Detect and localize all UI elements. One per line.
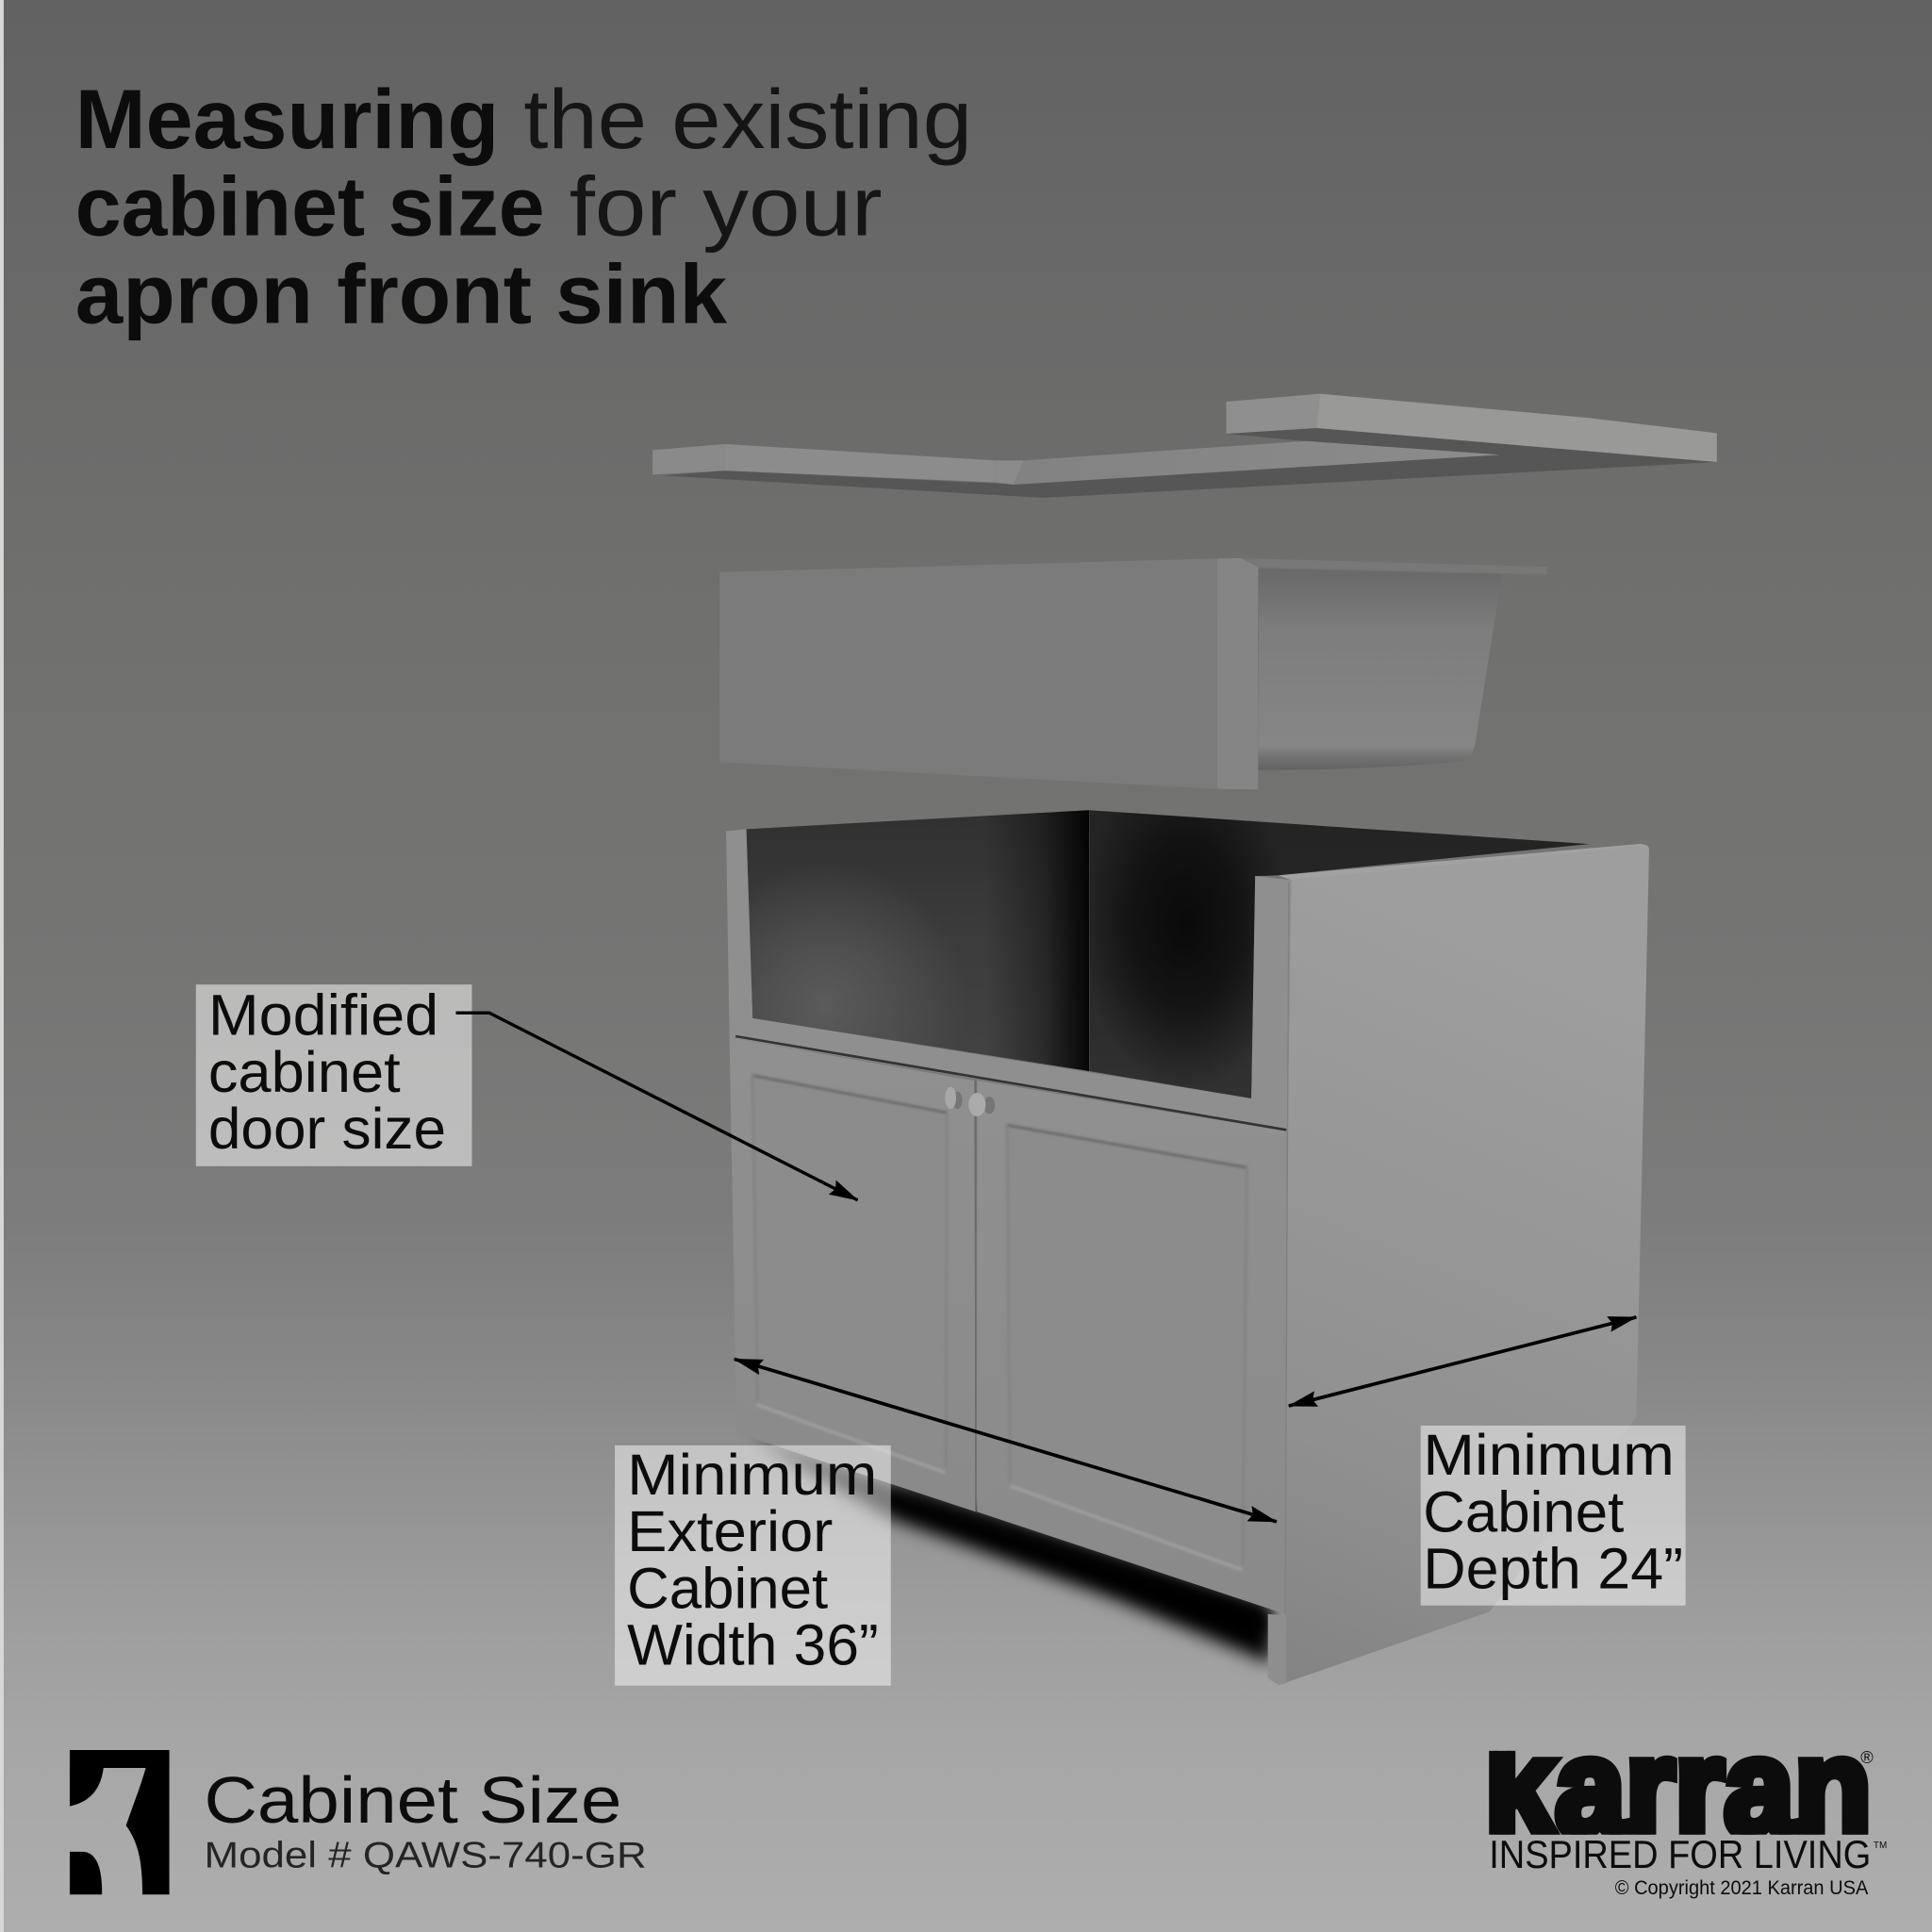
side panel: [1279, 845, 1649, 1685]
label: modified cabinet door size: cabinet: [208, 1040, 401, 1105]
countertop: [652, 394, 1717, 498]
tagline: INSPIRED FOR LIVING: [1489, 1832, 1871, 1876]
label: modified cabinet door size: [196, 983, 471, 1166]
interior right wall: [1089, 810, 1590, 1098]
registered mark: ®: [1860, 1747, 1874, 1767]
sink apron face: [719, 558, 1217, 789]
sink: [719, 558, 1547, 789]
sink bowl: [1258, 569, 1502, 770]
sink apron return: [1217, 558, 1258, 789]
door bottom bevels: [756, 1405, 1242, 1570]
label: minimum cabinet depth: Cabinet: [1423, 1479, 1624, 1544]
title: [75, 73, 972, 340]
arrow: door size: [456, 1013, 858, 1200]
panel recess shadows: [752, 1076, 1247, 1167]
door knobs: [945, 1087, 995, 1116]
interior left wall: [747, 810, 1090, 1071]
sink rim: [1217, 558, 1547, 574]
gap between doors: [975, 1081, 977, 1511]
left door inner panel: [752, 1076, 947, 1467]
side panel top edge: [1279, 844, 1645, 880]
title: for your: [570, 160, 883, 254]
icon: K monogram: [70, 1750, 170, 1894]
arrow: cabinet width: [735, 1359, 1277, 1522]
copyright: © Copyright 2021 Karran USA: [1615, 1875, 1869, 1899]
label: minimum cabinet depth: Depth 24”: [1423, 1536, 1683, 1601]
label: modified cabinet door size: Modified: [208, 983, 438, 1049]
trademark: TM: [1874, 1841, 1887, 1851]
right door: [977, 1081, 1287, 1614]
label: modified cabinet door size: door size: [208, 1097, 446, 1162]
cabinet: [684, 758, 1649, 1685]
title: the existing: [523, 73, 972, 166]
countertop underside shadow: [663, 427, 1716, 498]
title: apron front sink: [75, 247, 728, 340]
label: minimum cabinet depth: Minimum: [1423, 1423, 1675, 1488]
countertop right end: [1226, 394, 1320, 434]
floor shadow under cabinet: [751, 1437, 1272, 1663]
right door inner panel: [1007, 1125, 1247, 1565]
footer heading: Cabinet Size: [205, 1763, 622, 1837]
label: minimum cabinet depth: [1421, 1423, 1686, 1606]
brand wordmark: karran: [1485, 1711, 1872, 1865]
countertop left end: [652, 444, 724, 474]
front frame: [726, 829, 1291, 1131]
title: Measuring: [75, 73, 499, 166]
model number: Model # QAWS-740-GR: [205, 1836, 647, 1876]
title: cabinet size: [75, 160, 545, 254]
countertop middle top: [1014, 441, 1500, 485]
left page edge: [0, 0, 4, 1932]
brand logo: [1489, 1750, 1886, 1899]
label: minimum exterior cabinet width: Exterior: [627, 1499, 833, 1564]
left door: [730, 1037, 976, 1511]
label: minimum exterior cabinet width: Width 36”: [627, 1612, 879, 1677]
corner line: [1285, 883, 1289, 1614]
gap above doors: [735, 1036, 1286, 1130]
label: minimum exterior cabinet width: Cabinet: [627, 1556, 828, 1621]
label: minimum exterior cabinet width: Minimum: [627, 1443, 877, 1508]
toe kick: [1268, 1614, 1286, 1685]
label: minimum exterior cabinet width: [615, 1443, 891, 1686]
arrow: cabinet depth: [1289, 1317, 1636, 1406]
